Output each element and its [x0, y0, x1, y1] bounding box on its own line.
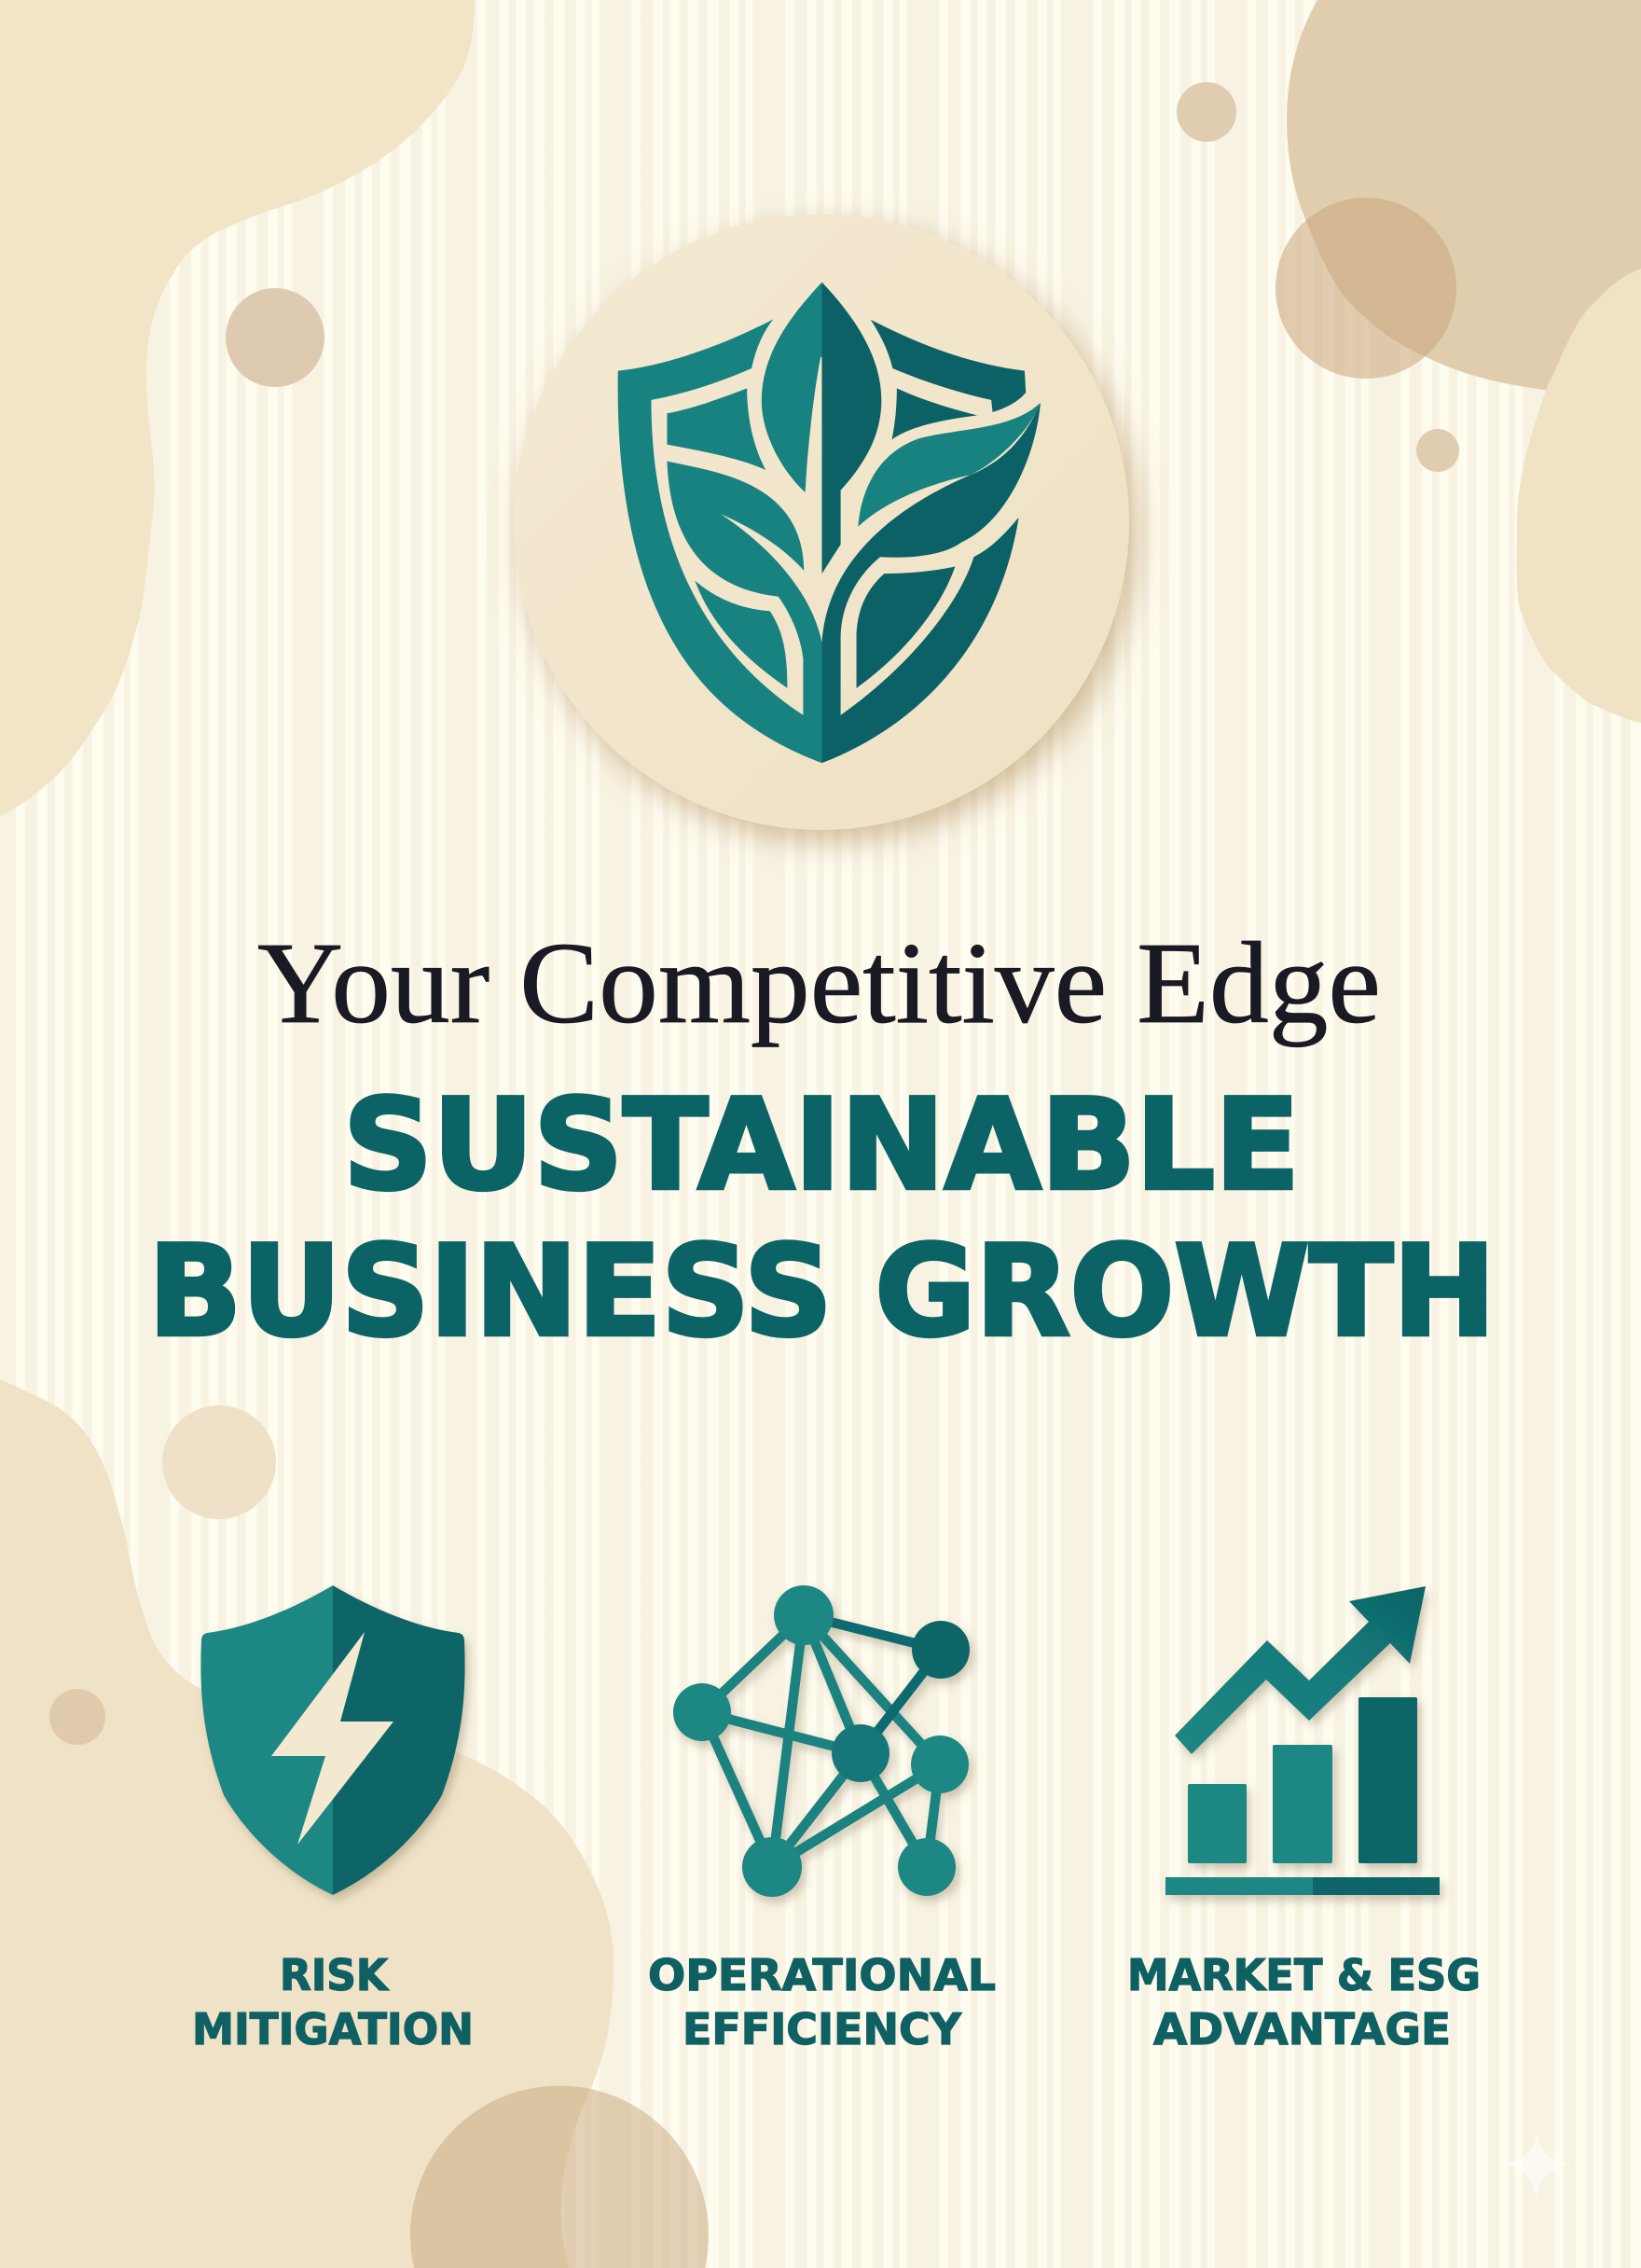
- decorative circle: mid left: [162, 1405, 276, 1519]
- background blob: bottom left: [0, 1379, 614, 2268]
- decorative circle: upper left: [226, 288, 324, 387]
- label: operational efficiency: [648, 1950, 996, 2054]
- decorative circle: lower left small: [49, 1689, 105, 1745]
- background blob: right edge: [1517, 269, 1641, 723]
- label: risk mitigation: [192, 1950, 474, 2054]
- decorative circle: right small: [1416, 429, 1459, 472]
- label: market and esg advantage: MARKET & ESG: [1127, 1950, 1481, 2000]
- icon: network: [673, 1585, 970, 1897]
- icon: shield with leaves: [618, 283, 1041, 763]
- title: your competitive edge: Your Competitive Edge: [257, 920, 1381, 1048]
- label: operational efficiency: EFFICIENCY: [683, 2004, 962, 2054]
- heading: business growth: BUSINESS GROWTH: [148, 1219, 1496, 1364]
- background blob: top right tan: [1287, 0, 1641, 390]
- logo badge: [514, 214, 1129, 830]
- label: risk mitigation: RISK: [280, 1950, 390, 2000]
- label: market and esg advantage: [1127, 1950, 1481, 2054]
- label: risk mitigation: MITIGATION: [192, 2004, 474, 2054]
- decorative circle: top right large: [1276, 198, 1456, 379]
- background blob: top left: [0, 0, 475, 816]
- label: market and esg advantage: ADVANTAGE: [1153, 2004, 1451, 2054]
- heading: sustainable: SUSTAINABLE: [343, 1072, 1300, 1218]
- label: operational efficiency: OPERATIONAL: [648, 1950, 996, 2000]
- icon: growth chart: [1165, 1586, 1440, 1895]
- icon: sparkle: [1501, 2132, 1572, 2199]
- icon: shield with lightning bolt: [200, 1585, 465, 1895]
- badge disc: [514, 214, 1129, 830]
- decorative circle: top right small: [1177, 82, 1236, 142]
- decorative circle: bottom: [410, 2085, 709, 2268]
